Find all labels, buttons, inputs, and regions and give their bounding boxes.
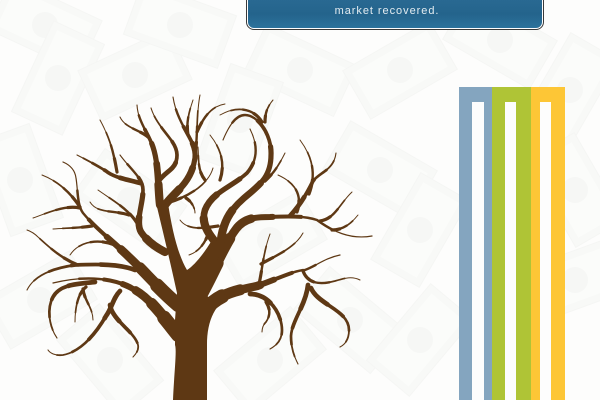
small twigs [27, 95, 360, 332]
banner: market recovered. [335, 5, 439, 17]
big limbs [53, 162, 372, 335]
large branches [120, 97, 271, 252]
slot: green bar [505, 102, 516, 400]
slot: yellow bar [540, 102, 551, 400]
slot: blue bar [472, 102, 484, 400]
bar: yellow [531, 87, 565, 400]
striped bars [459, 87, 565, 400]
bar: blue [459, 87, 492, 400]
bar: green [492, 87, 531, 400]
tree trunk [157, 203, 235, 400]
medium branches [27, 108, 349, 364]
banner [246, 0, 544, 30]
